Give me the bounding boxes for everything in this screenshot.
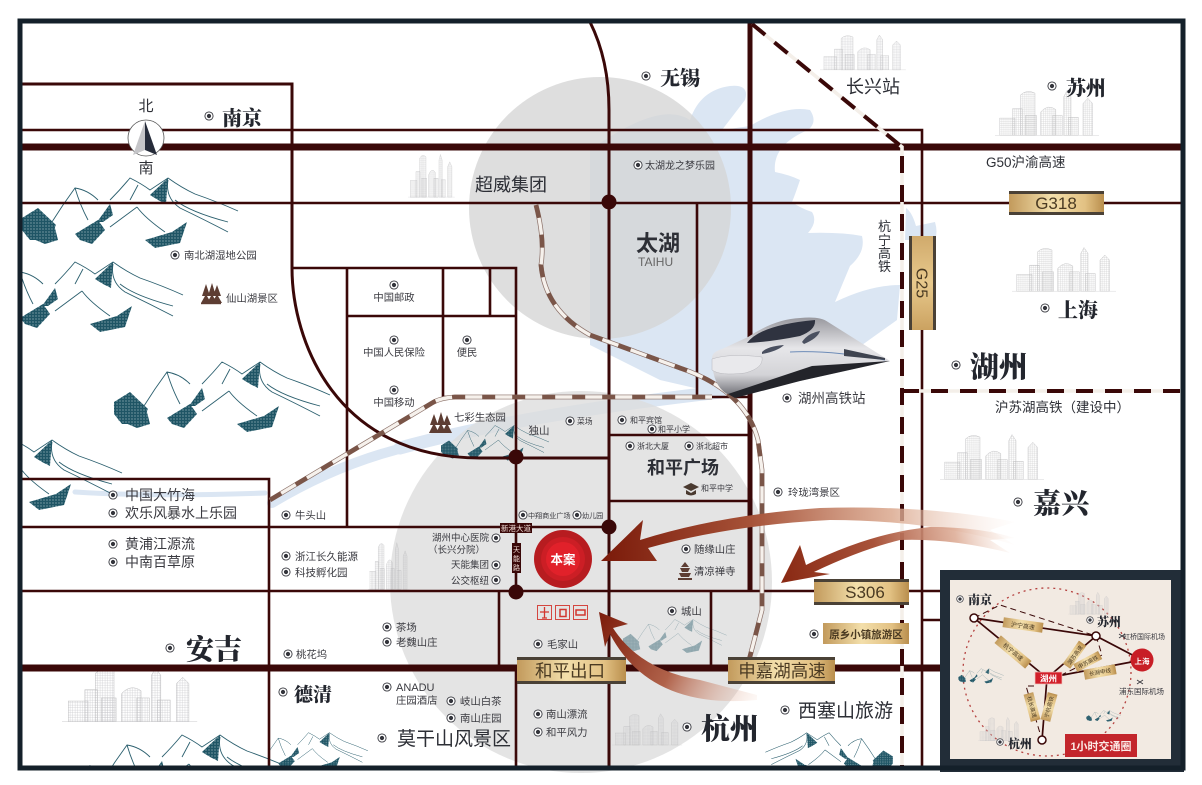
- arrow to project from the east: [601, 508, 1015, 561]
- city labels: 莫干山风景区: [397, 728, 511, 750]
- inset: 1-hour traffic circle: 苏州: [1097, 614, 1121, 629]
- points of interest: 幼儿园: [582, 511, 603, 520]
- road plate: G25: [909, 236, 936, 330]
- city labels: 杭州: [701, 713, 759, 746]
- project marker: [534, 530, 592, 588]
- city labels: [166, 66, 1106, 750]
- inset: 1-hour traffic circle: 湖苏高速: [1065, 643, 1085, 666]
- points of interest: 和平风力: [546, 726, 588, 739]
- line labels: [878, 154, 1130, 415]
- points of interest: 中国移动: [373, 396, 415, 409]
- points of interest: 天能集团: [451, 559, 489, 571]
- points of interest: 庄园酒店: [396, 694, 438, 707]
- inset: 1-hour traffic circle: 湖州: [1040, 674, 1057, 684]
- city labels: TAIHU: [638, 255, 673, 269]
- arrow from the east to the road: [781, 527, 1015, 583]
- road name labels: 新港大道: [501, 523, 531, 533]
- inset: 1-hour traffic circle: 长湖申线: [1088, 666, 1112, 678]
- water: river: [75, 392, 720, 503]
- gray area circles: [390, 77, 772, 773]
- points of interest: 浙北超市: [696, 441, 728, 451]
- compass: [128, 98, 164, 177]
- inset: 1-hour traffic circle: 虹桥国际机场: [1123, 632, 1165, 641]
- points of interest: 和平宾馆: [630, 415, 662, 425]
- points of interest: 随缘山庄: [694, 543, 736, 556]
- points of interest: 中国邮政: [373, 291, 415, 304]
- road name labels: 能: [513, 554, 520, 563]
- points of interest: 南山漂流: [546, 708, 588, 721]
- inset: 1-hour traffic circle: 申苏高铁: [1076, 653, 1100, 671]
- high-speed rail dashed lines: [752, 24, 1183, 768]
- gold plate: 原乡小镇旅游区: 原乡小镇旅游区: [829, 628, 903, 641]
- points of interest: 南山庄园: [460, 712, 502, 725]
- inset: 1-hour traffic circle: 沪宁高速: [1010, 620, 1035, 632]
- road plate: S306: [814, 579, 909, 605]
- city labels: 和平广场: [647, 458, 719, 478]
- arrow from south-east: [599, 612, 757, 701]
- gold plate: 原乡小镇旅游区: [823, 623, 909, 644]
- points of interest: 浙江长久能源: [295, 550, 358, 563]
- compass: 南: [138, 160, 154, 177]
- points of interest: 中翔商业广场: [528, 511, 571, 520]
- line labels: 铁: [878, 259, 891, 274]
- line labels: 高: [878, 246, 891, 261]
- road plate: G25: G25: [912, 268, 930, 298]
- points of interest: 中国人民保险: [363, 346, 426, 359]
- inset: 1-hour traffic circle: 南京: [968, 592, 993, 607]
- points of interest: 黄浦江源流: [125, 536, 195, 552]
- points of interest: 南北湖湿地公园: [184, 249, 257, 262]
- icons: plane, luggage, bus: [538, 606, 588, 620]
- city labels: 嘉兴: [1033, 487, 1092, 520]
- city labels: 超威集团: [475, 175, 547, 195]
- inset: 1-hour traffic circle: 杭州: [1008, 736, 1032, 751]
- road name labels: 路: [513, 563, 520, 572]
- points of interest: 浙北大厦: [637, 441, 669, 451]
- project marker: 本案: [550, 552, 576, 567]
- points of interest: 菜场: [577, 416, 593, 426]
- points of interest: 岐山白茶: [460, 695, 502, 708]
- road name labels: [500, 523, 532, 573]
- icon: forest: [201, 283, 452, 433]
- points of interest: 欢乐风暴水上乐园: [125, 505, 237, 521]
- points of interest: 公交枢纽: [451, 575, 489, 587]
- road plate: 申嘉湖高速: [728, 657, 835, 684]
- points of interest: 科技孵化园: [295, 566, 348, 579]
- points of interest: 中南百草原: [125, 554, 195, 570]
- city labels: 湖州: [970, 351, 1028, 384]
- points of interest: 和平中学: [701, 483, 733, 493]
- city labels: 无锡: [660, 66, 700, 90]
- points of interest: 独山: [528, 424, 550, 437]
- inset: 1-hour traffic circle: 宁杭高铁: [1042, 695, 1056, 719]
- points of interest: 清凉禅寺: [694, 565, 736, 578]
- road plate: S306: S306: [845, 583, 885, 602]
- inset: 1-hour traffic circle: 上海: [1134, 656, 1150, 666]
- points of interest: [109, 159, 865, 739]
- points of interest: 太湖龙之梦乐园: [645, 159, 715, 172]
- points of interest: （长兴分院）: [428, 544, 485, 556]
- points of interest: 城山: [681, 606, 702, 618]
- line labels: G50沪渝高速: [986, 154, 1066, 170]
- inset: 1-hour traffic circle: 1小时交通圈: [1070, 739, 1132, 753]
- road plate: G318: [1009, 191, 1104, 215]
- road plate: 和平出口: 和平出口: [535, 661, 605, 681]
- line labels: 沪苏湖高铁（建设中）: [995, 399, 1130, 415]
- points of interest: 老魏山庄: [396, 636, 438, 649]
- city labels: 上海: [1058, 299, 1098, 322]
- line labels: 宁: [878, 233, 891, 248]
- points of interest: 茶场: [396, 621, 417, 634]
- points of interest: 毛家山: [547, 638, 578, 651]
- points of interest: 牛头山: [295, 509, 326, 522]
- icon: graduation cap: [683, 483, 699, 496]
- inset: 1-hour traffic circle: [940, 570, 1184, 772]
- points of interest: 湖州中心医院: [432, 532, 489, 544]
- icon: pagoda: [678, 562, 692, 580]
- road plate: 和平出口: [517, 657, 626, 684]
- road name labels: 天: [513, 546, 520, 554]
- points of interest: ANADU: [396, 682, 435, 694]
- road plate: G318: G318: [1035, 194, 1077, 213]
- inset: 1-hour traffic circle: 杭长高速: [1025, 695, 1039, 719]
- city labels: 德清: [294, 683, 332, 706]
- line labels: 杭: [878, 219, 891, 234]
- points of interest: 便民: [457, 346, 477, 359]
- city labels: 太湖: [636, 231, 680, 256]
- points of interest: 玲珑湾景区: [788, 486, 840, 499]
- city labels: 长兴站: [846, 77, 900, 97]
- points of interest: 湖州高铁站: [798, 390, 866, 406]
- points of interest: 仙山湖景区: [226, 292, 278, 305]
- compass: 北: [138, 98, 154, 115]
- city labels: 安吉: [186, 633, 242, 666]
- road junction nodes: [508, 194, 616, 600]
- railway lines: [270, 205, 762, 668]
- points of interest: 桃花坞: [296, 648, 327, 661]
- city labels: 南京: [222, 106, 263, 130]
- city labels: 苏州: [1066, 76, 1106, 100]
- inset: 1-hour traffic circle: 杭宁高速: [1001, 641, 1025, 663]
- points of interest: 中国大竹海: [125, 487, 195, 503]
- water: Taihu lake: [75, 86, 936, 503]
- road plate: 申嘉湖高速: 申嘉湖高速: [738, 661, 826, 681]
- points of interest: 和平小学: [658, 424, 690, 434]
- mountains: [0, 178, 893, 785]
- inset: 1-hour traffic circle: 浦东国际机场: [1119, 686, 1164, 696]
- skylines: [62, 35, 1116, 745]
- points of interest: 七彩生态园: [454, 411, 506, 424]
- city labels: 西塞山旅游: [798, 700, 893, 722]
- train icon: [712, 318, 890, 398]
